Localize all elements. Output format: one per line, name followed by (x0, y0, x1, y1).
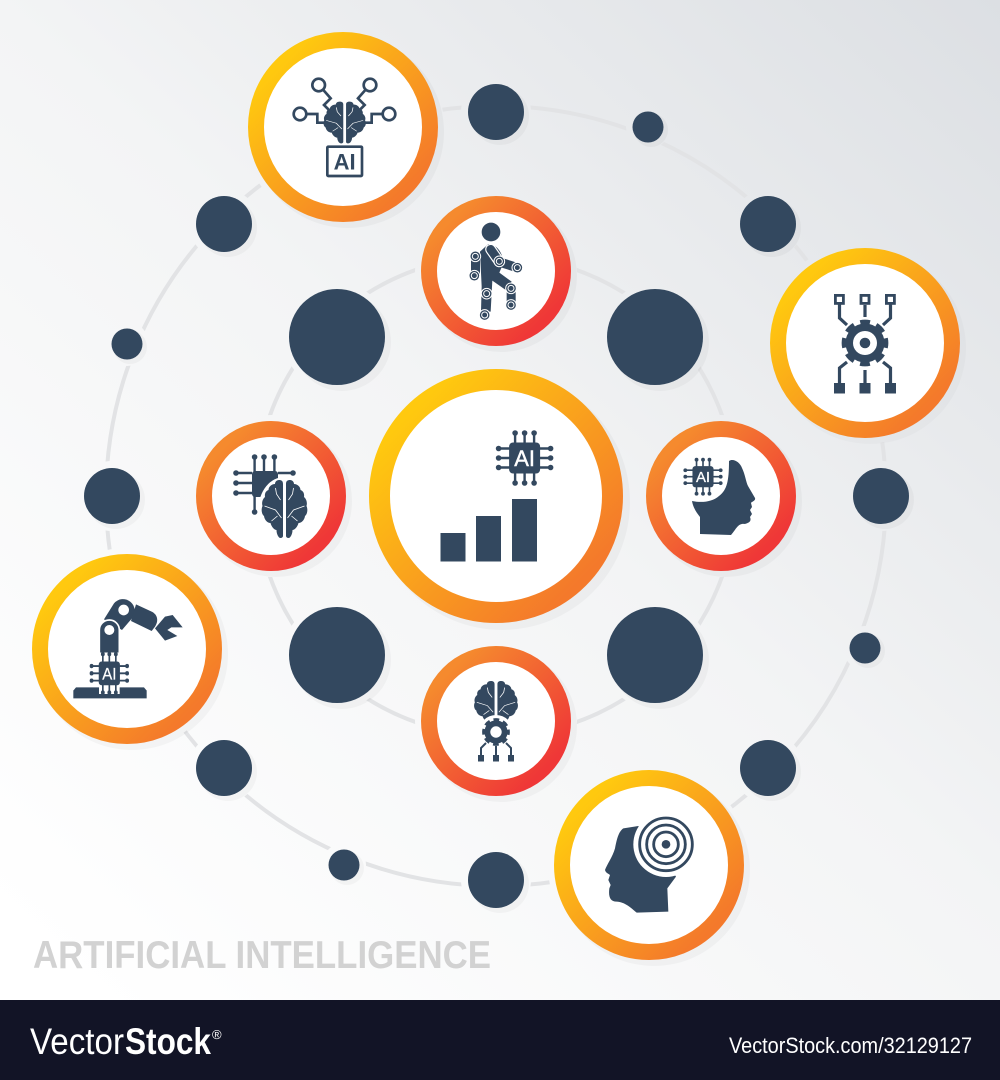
icon: robot arm: AI (102, 666, 116, 684)
panel: brain with gear network (415, 640, 577, 802)
panel: head with target (548, 764, 750, 966)
footer image id: VectorStock.com/32129127 (729, 1033, 972, 1058)
icon: growth bars (440, 499, 537, 562)
inner ring navy dots (283, 283, 709, 709)
footer logo: Stock (125, 1021, 211, 1062)
panel: brain with AI box (242, 26, 444, 228)
icon: AI chip: AI (514, 446, 535, 471)
outer connecting ring (106, 106, 886, 886)
icon: robot arm (73, 599, 183, 698)
icon: head profile with target rings (605, 812, 699, 913)
icon: humanoid with joints (469, 223, 523, 320)
icon: head with AI chip: AI (696, 469, 710, 486)
panel: gear with nodes (764, 242, 966, 444)
title: ARTIFICIAL INTELLIGENCE (33, 934, 491, 977)
footer logo (30, 1021, 222, 1062)
footer bar (0, 1000, 1000, 1080)
icon: processor merging with brain (233, 454, 310, 541)
icon: brain with circuit nodes and AI box (294, 79, 395, 176)
icon: brain with circuit nodes and AI box: AI (334, 150, 356, 175)
icon: brain gear (474, 681, 518, 762)
footer logo: Vector (30, 1021, 124, 1062)
panel: AI head profile (640, 415, 802, 577)
icon: gear network (834, 295, 896, 394)
icon: AI chip (496, 430, 553, 486)
panel: robot arm with AI chip (26, 548, 228, 750)
footer logo: ® (212, 1027, 222, 1042)
panel: chip and brain (190, 415, 352, 577)
panel: center bar chart with AI chip (362, 362, 630, 630)
inner connecting ring (256, 256, 736, 736)
panel: walking robot person (415, 190, 577, 352)
outer ring navy dots (77, 77, 916, 915)
icon: head with AI chip (683, 458, 755, 535)
